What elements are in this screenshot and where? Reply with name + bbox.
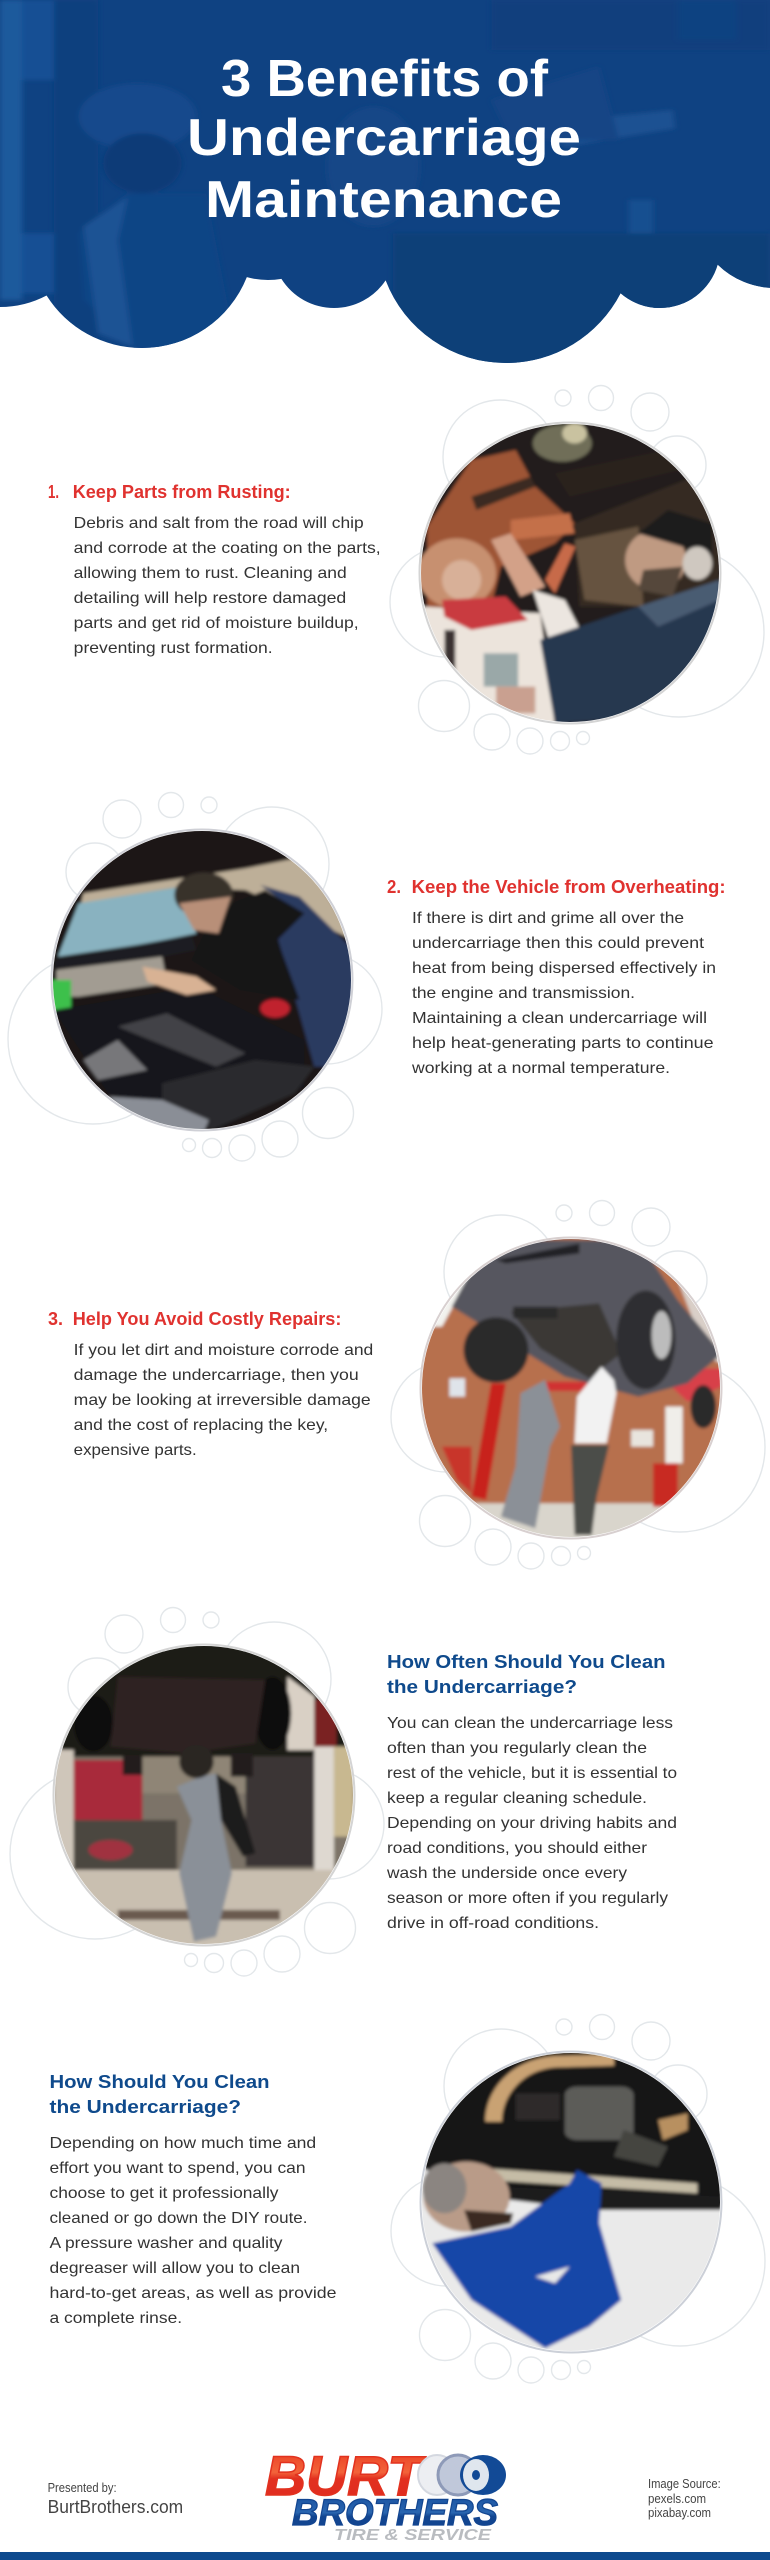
body text 5 <box>50 2135 337 2327</box>
body text 4: often than you regularly clean the <box>387 1740 647 1757</box>
photo: mechanic in blue under car <box>417 2050 727 2353</box>
footer: image source: pixabay.com <box>648 2505 711 2520</box>
panel: how should you clean <box>50 2014 765 2383</box>
body text 2: undercarriage then this could prevent <box>412 935 705 952</box>
heading 3: 3. <box>48 1308 63 1329</box>
body text 2: If there is dirt and grime all over the <box>412 910 684 927</box>
panel: keep parts from rusting <box>48 386 764 754</box>
body text 2: working at a normal temperature. <box>411 1060 670 1077</box>
body text 4: wash the underside once every <box>386 1865 627 1882</box>
logo: Burt Brothers Tire & Service <box>265 2444 506 2544</box>
body text 1: parts and get rid of moisture buildup, <box>74 615 359 632</box>
panel: how often should you clean <box>10 1608 677 1976</box>
body text 1: Debris and salt from the road will chip <box>74 515 364 532</box>
icon: three tires <box>418 2455 506 2495</box>
decorative bubbles 3 <box>391 1200 765 1569</box>
decorative bubbles 2 <box>8 792 382 1161</box>
body text 5: A pressure washer and quality <box>50 2235 282 2252</box>
photo: two men under lifted car <box>417 1237 727 1540</box>
heading 5: the Undercarriage? <box>50 2096 241 2117</box>
heading 1: 1. <box>48 481 59 502</box>
footer: presented by <box>48 2480 183 2517</box>
body text 4: road conditions, you should either <box>387 1840 648 1857</box>
body text 4: keep a regular cleaning schedule. <box>387 1790 647 1807</box>
title: Undercarriage <box>187 109 581 167</box>
photo: mechanic at engine bay <box>49 827 359 1133</box>
body text 1: allowing them to rust. Cleaning and <box>74 565 347 582</box>
body text 2: help heat-generating parts to continue <box>412 1035 714 1052</box>
body text 1: detailing will help restore damaged <box>74 590 346 607</box>
footer: image source <box>648 2476 721 2520</box>
photo: mechanic walking under lift <box>52 1642 356 1948</box>
body text 5: degreaser will allow you to clean <box>50 2260 300 2277</box>
body text 5: Depending on how much time and <box>50 2135 316 2152</box>
heading 4: How Often Should You Clean <box>387 1651 666 1672</box>
body text 5: effort you want to spend, you can <box>50 2160 306 2177</box>
body text 5: a complete rinse. <box>50 2310 182 2327</box>
title: 3 Benefits of <box>221 50 549 108</box>
logo: Burt Brothers Tire & Service: TIRE & SERVICE <box>334 2527 493 2544</box>
photo: mechanic inspecting chassis <box>417 420 727 727</box>
body text 4: You can clean the undercarriage less <box>387 1715 673 1732</box>
body text 4: season or more often if you regularly <box>387 1890 668 1907</box>
panel: keep the vehicle from overheating <box>8 792 726 1161</box>
heading 3: Help You Avoid Costly Repairs: <box>73 1308 341 1329</box>
body text 3 <box>74 1342 373 1459</box>
decorative bubbles 5 <box>391 2014 765 2383</box>
body text 2: the engine and transmission. <box>412 985 635 1002</box>
body text 1: preventing rust formation. <box>74 640 273 657</box>
panel: help you avoid costly repairs <box>48 1200 765 1569</box>
heading 1: Keep Parts from Rusting: <box>73 481 291 502</box>
title: Maintenance <box>205 171 562 229</box>
logo: Burt Brothers Tire & Service: BROTHERS <box>292 2492 498 2533</box>
decorative bubbles 4 <box>10 1608 384 1976</box>
title <box>187 50 581 229</box>
hero banner <box>0 0 770 370</box>
body text 3: and the cost of replacing the key, <box>74 1417 328 1434</box>
body text 4: rest of the vehicle, but it is essential to <box>387 1765 677 1782</box>
heading 5 <box>50 2071 270 2117</box>
body text 2 <box>411 910 716 1077</box>
body text 1: and corrode at the coating on the parts, <box>74 540 381 557</box>
body text 5: cleaned or go down the DIY route. <box>50 2210 308 2227</box>
body text 3: expensive parts. <box>74 1442 197 1459</box>
heading 5: How Should You Clean <box>50 2071 270 2092</box>
heading 4: the Undercarriage? <box>387 1676 577 1697</box>
heading 2: Keep the Vehicle from Overheating: <box>412 876 726 897</box>
footer: image source: Image Source: <box>648 2476 721 2491</box>
body text 2: heat from being dispersed effectively in <box>412 960 716 977</box>
footer bar <box>0 2552 770 2560</box>
heading 2: 2. <box>387 876 401 897</box>
body text 4: drive in off-road conditions. <box>387 1915 599 1932</box>
logo: Burt Brothers Tire & Service: BURT <box>265 2444 427 2507</box>
footer: presented by: Presented by: <box>48 2480 117 2495</box>
body text 2: Maintaining a clean undercarriage will <box>412 1010 707 1027</box>
body text 3: may be looking at irreversible damage <box>74 1392 371 1409</box>
body text 1 <box>74 515 381 657</box>
body text 4 <box>386 1715 677 1932</box>
footer: presented by: BurtBrothers.com <box>48 2497 183 2517</box>
body text 5: hard-to-get areas, as well as provide <box>50 2285 337 2302</box>
heading 4 <box>387 1651 666 1697</box>
footer: image source: pexels.com <box>648 2491 706 2506</box>
decorative bubbles 1 <box>390 386 764 754</box>
body text 3: damage the undercarriage, then you <box>74 1367 359 1384</box>
body text 4: Depending on your driving habits and <box>387 1815 677 1832</box>
body text 3: If you let dirt and moisture corrode and <box>74 1342 373 1359</box>
body text 5: choose to get it professionally <box>50 2185 278 2202</box>
